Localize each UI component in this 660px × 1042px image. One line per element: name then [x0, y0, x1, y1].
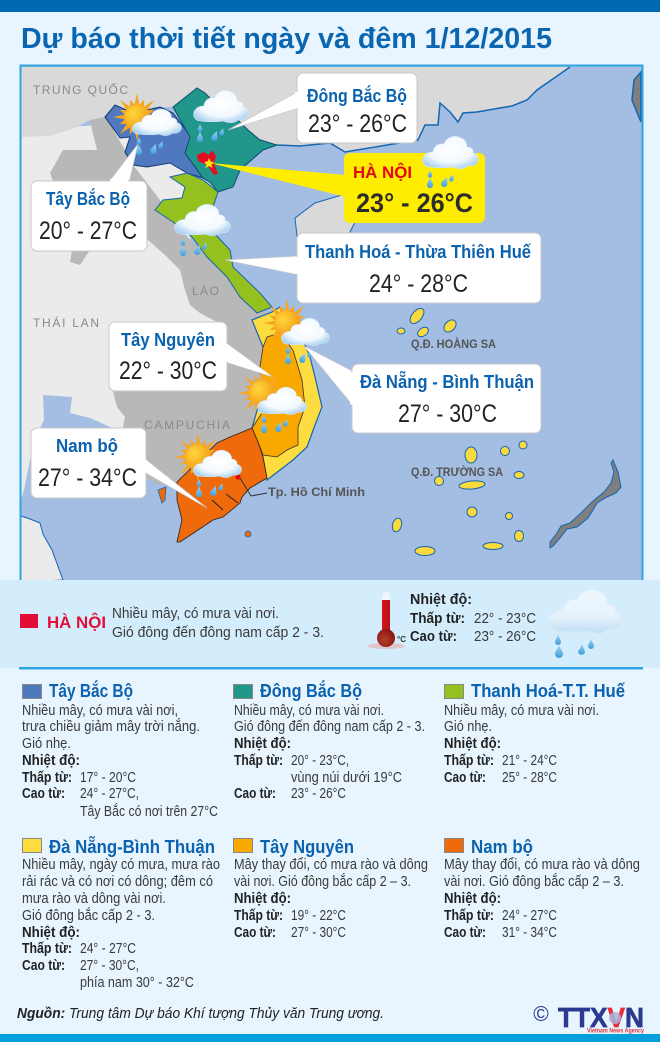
labels: countries: THÁI LAN	[33, 315, 99, 330]
heading: Nam bộ	[471, 837, 533, 857]
labels: countries: CAMPUCHIA	[144, 418, 230, 432]
heading: Ha Noi: HÀ NỘI	[47, 613, 106, 632]
labels: countries: LÀO	[192, 283, 219, 298]
text: 24° - 27°C	[80, 941, 136, 957]
land: Malay peninsula	[21, 516, 63, 582]
title: Dự báo thời tiết ngày và đêm 1/12/2015	[21, 23, 552, 55]
labels: countries: TRUNG QUỐC	[33, 82, 128, 97]
text: 24° - 27°C,	[80, 786, 139, 802]
callout: Da Nang - Binh Thuan: 27° - 30°C	[398, 400, 497, 428]
text: Thấp từ:	[234, 753, 283, 769]
region: Ha Noi	[197, 150, 218, 175]
text: 19° - 22°C	[291, 908, 346, 924]
text: 27° - 30°C	[291, 925, 346, 941]
callout: Nam Bo: Nam bộ	[56, 436, 118, 456]
text: Thấp từ:	[444, 753, 494, 769]
text: Gió đông đến đông nam cấp 2 - 3.	[234, 719, 425, 735]
text: vùng núi dưới 19°C	[291, 770, 402, 786]
text: Ha Noi temperature: Cao từ:	[410, 629, 457, 645]
text: Nhiều mây, có mưa vài nơi.	[234, 703, 384, 719]
bottom bar	[0, 1034, 660, 1042]
text: Gió nhẹ.	[444, 719, 492, 735]
text: Cao từ:	[22, 786, 65, 802]
text	[22, 703, 218, 820]
text: mưa rào và dông vài nơi.	[22, 891, 166, 907]
text: Mây thay đổi, có mưa rào và dông	[234, 857, 428, 873]
icon: thermometer: °C	[397, 635, 406, 644]
labels: archipelagos: Q.Đ. TRƯỜNG SA	[411, 464, 503, 479]
text	[444, 857, 640, 941]
heading: Tây Bắc Bộ	[49, 680, 133, 701]
icon: rain cloud	[549, 590, 622, 658]
text: Thấp từ:	[444, 908, 494, 924]
panel: Dong Bac Bo	[234, 680, 425, 802]
islands: Truong Sa	[391, 441, 527, 556]
text: vài nơi. Gió đông bắc cấp 2 – 3.	[234, 873, 411, 890]
text: Gió nhẹ.	[22, 736, 71, 752]
region: Nam Bo	[177, 428, 267, 542]
weather: Tay Bac	[113, 93, 181, 155]
text: Ha Noi temperature: 23° - 26°C	[474, 629, 536, 645]
heading: Đà Nẵng-Bình Thuận	[49, 835, 215, 857]
panel: map	[20, 65, 643, 586]
text: Ha Noi description	[112, 606, 324, 641]
callout: Tay Bac Bo: 20° - 27°C	[39, 217, 137, 245]
text: Nhiệt độ:	[444, 736, 501, 752]
text: vài nơi. Gió đông bắc cấp 2 – 3.	[444, 873, 624, 890]
panel: Tay Bac Bo	[22, 680, 218, 820]
labels: archipelagos	[411, 336, 503, 479]
region: Dong Bac	[173, 88, 277, 192]
text: Nhiệt độ:	[234, 891, 291, 907]
swatch	[234, 838, 252, 852]
swatch	[234, 684, 252, 698]
callout: Thanh Hoa - Thua Thien Hue: Thanh Hoá - Thừa Thiên Huế	[305, 242, 532, 262]
swatch	[444, 684, 464, 698]
text: 24° - 27°C	[502, 908, 557, 924]
text: Nhiều mây, có mưa vài nơi,	[22, 703, 178, 719]
icon: Ha Noi star	[204, 158, 214, 168]
panel: Nam Bo	[444, 837, 640, 941]
text: Nhiệt độ:	[22, 753, 80, 769]
weather: Dong Bac	[194, 90, 248, 142]
marker: Ho Chi Minh City: Tp. Hồ Chí Minh	[268, 485, 365, 499]
callout: Da Nang - Binh Thuan	[304, 346, 541, 433]
region: Tay Bac	[105, 105, 210, 182]
callout: Thanh Hoa - Thua Thien Hue	[225, 233, 541, 303]
panel: Ha Noi summary	[0, 580, 660, 670]
heading: Tây Nguyên	[260, 837, 354, 857]
heading: Đông Bắc Bộ	[260, 680, 362, 701]
text: 27° - 30°C,	[80, 958, 139, 974]
logo: TTXVN: TTXVN	[558, 1002, 644, 1033]
callout: Tay Nguyen: 22° - 30°C	[119, 357, 217, 385]
callout: Da Nang - Binh Thuan: Đà Nẵng - Bình Thuận	[360, 370, 534, 392]
text: Ha Noi temperature	[410, 592, 536, 645]
text: Ha Noi description: Gió đông đến đông nam cấp 2 - 3.	[112, 625, 324, 641]
weather: Thanh Hoa - Hue	[175, 204, 230, 256]
text: Cao từ:	[234, 925, 276, 941]
text: Mây thay đổi, có mưa rào và dông	[444, 857, 640, 873]
source line: Nguồn: Trung tâm Dự báo Khí tượng Thủy văn Trung ương.	[17, 1005, 384, 1022]
text: Cao từ:	[22, 958, 65, 974]
text: Nhiều mây, ngày có mưa, mưa rào	[22, 857, 220, 873]
weather: Tay Nguyen	[238, 369, 306, 433]
callout: Tay Nguyen	[109, 322, 273, 391]
weather: Da Nang - Binh Thuan	[263, 299, 329, 364]
callout: Nam Bo	[31, 428, 207, 508]
delta channels	[212, 494, 238, 510]
text: trưa chiều giảm mây trời nắng.	[22, 718, 200, 735]
callout: Dong Bac Bo	[228, 73, 417, 143]
text: Nhiệt độ:	[444, 891, 501, 907]
text: 31° - 34°C	[502, 925, 557, 941]
text: Ha Noi temperature: Nhiệt độ:	[410, 592, 472, 608]
icon: thermometer	[367, 592, 406, 649]
text: Cao từ:	[444, 925, 486, 941]
island: Luzon edge	[632, 72, 641, 122]
text	[234, 703, 425, 802]
top bar	[0, 0, 660, 12]
labels: archipelagos: Q.Đ. HOÀNG SA	[411, 336, 496, 351]
text: 17° - 20°C	[80, 770, 136, 786]
callout: Tay Bac Bo	[31, 144, 147, 251]
marker: Ho Chi Minh City	[235, 474, 365, 499]
logo: TTXVN: Vietnam News Agency	[587, 1028, 645, 1034]
text	[22, 857, 220, 991]
callout: Ha Noi: HÀ NỘI	[353, 163, 412, 182]
swatch	[22, 838, 42, 852]
island: Borneo	[550, 460, 621, 548]
callout: Dong Bac Bo: 23° - 26°C	[308, 110, 407, 138]
heading: Thanh Hoá-T.T. Huế	[471, 681, 626, 701]
text: Cao từ:	[234, 786, 276, 802]
text	[444, 703, 599, 786]
region: Thanh Hoa - Hue	[155, 173, 272, 313]
weather: Ha Noi	[423, 136, 478, 188]
panel: Thanh Hoa - T.T. Hue	[444, 681, 626, 786]
map border	[20, 66, 642, 586]
land: Laos and Cambodia	[50, 116, 275, 485]
callout: Dong Bac Bo: Đông Bắc Bộ	[307, 85, 407, 106]
swatch	[22, 684, 42, 698]
text: 23° - 26°C	[291, 786, 346, 802]
panel: Tay Nguyen	[234, 837, 428, 941]
text: Thấp từ:	[234, 908, 283, 924]
text: Ha Noi temperature: Thấp từ:	[410, 611, 465, 627]
text: Nhiệt độ:	[234, 736, 291, 752]
callout: Ha Noi: 23° - 26°C	[356, 188, 473, 218]
callout: Tay Bac Bo: Tây Bắc Bộ	[46, 188, 130, 209]
island: Phu Quoc	[158, 487, 166, 503]
text: rải rác và có nơi có dông; đêm có	[22, 874, 213, 890]
text: Nhiệt độ:	[22, 925, 80, 941]
text: Tây Bắc có nơi trên 27°C	[80, 803, 218, 820]
panel: Da Nang - Binh Thuan	[22, 835, 220, 991]
text: Gió đông bắc cấp 2 - 3.	[22, 907, 155, 924]
region: Da Nang - Binh Thuan	[252, 307, 322, 480]
land: Hainan	[295, 194, 362, 236]
callout: Nam Bo: 27° - 34°C	[38, 464, 137, 492]
island: Con Dao	[245, 531, 251, 537]
islands: Hoang Sa	[397, 306, 458, 339]
text: phía nam 30° - 32°C	[80, 975, 194, 991]
callout: Ha Noi	[210, 136, 485, 223]
text: Ha Noi temperature: 22° - 23°C	[474, 611, 536, 627]
land: China	[21, 67, 570, 152]
swatch	[444, 838, 464, 852]
weather: Nam Bo	[174, 433, 241, 497]
region: Tay Nguyen	[252, 333, 305, 457]
coast line: China	[277, 67, 570, 152]
text: Ha Noi description: Nhiều mây, có mưa vài nơi.	[112, 606, 279, 622]
text: 21° - 24°C	[502, 753, 557, 769]
swatch: Ha Noi	[20, 614, 38, 628]
text: Cao từ:	[444, 770, 486, 786]
text: Thấp từ:	[22, 941, 72, 957]
callout: Tay Nguyen: Tây Nguyên	[121, 330, 215, 350]
land: Thailand and Myanmar	[21, 125, 230, 500]
icon: copyright: ©	[533, 1003, 549, 1026]
text: Nhiều mây, có mưa vài nơi.	[444, 703, 599, 719]
text: 25° - 28°C	[502, 770, 557, 786]
labels: countries	[33, 82, 230, 432]
text	[234, 857, 428, 941]
callout: Thanh Hoa - Thua Thien Hue: 24° - 28°C	[369, 270, 468, 298]
text: Thấp từ:	[22, 770, 72, 786]
text: 20° - 23°C,	[291, 753, 349, 769]
